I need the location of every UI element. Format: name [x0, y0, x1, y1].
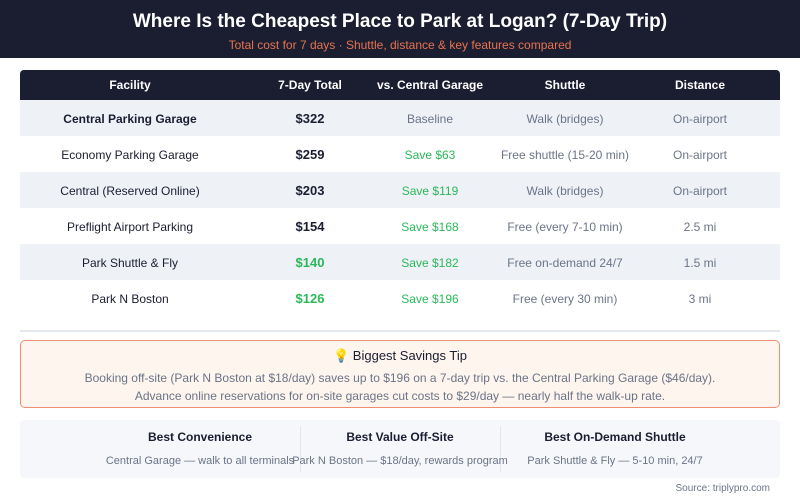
table: Save $196	[401, 292, 459, 306]
table: vs. Central Garage	[377, 78, 483, 92]
panel: best picks	[20, 420, 780, 478]
table: Save $63	[405, 148, 455, 162]
panel: best picks: Best Convenience	[148, 430, 252, 444]
table: 3 mi	[689, 292, 711, 306]
table: Save $182	[401, 256, 459, 270]
panel: best picks: Best On-Demand Shuttle	[544, 430, 686, 444]
table: Central Parking Garage	[63, 112, 197, 126]
source: Source: triplypro.com	[676, 483, 770, 494]
panel: best picks: Central Garage — walk to all terminals	[106, 455, 294, 467]
table: Free shuttle (15-20 min)	[501, 148, 629, 162]
table: $322	[296, 111, 324, 126]
table: Park Shuttle & Fly	[82, 256, 178, 270]
table: Walk (bridges)	[527, 112, 603, 126]
table: Free on-demand 24/7	[507, 256, 623, 270]
table: Free (every 30 min)	[513, 292, 617, 306]
table: 7-Day Total	[278, 78, 342, 92]
table: Free (every 7-10 min)	[507, 220, 623, 234]
table: $259	[296, 147, 324, 162]
table: Economy Parking Garage	[61, 148, 199, 162]
table	[20, 70, 780, 306]
table: Baseline	[407, 112, 453, 126]
table: On-airport	[673, 112, 727, 126]
table: 1.5 mi	[684, 256, 716, 270]
panel: best picks: Park Shuttle & Fly — 5-10 min, 24/7	[527, 455, 703, 467]
table: Shuttle	[545, 78, 585, 92]
table: Walk (bridges)	[527, 184, 603, 198]
table: Facility	[109, 78, 151, 92]
table: Central (Reserved Online)	[60, 184, 200, 198]
table: On-airport	[673, 148, 727, 162]
table: $203	[296, 183, 324, 198]
header: Where Is the Cheapest Place to Park at Logan? (7-Day Trip)	[133, 11, 667, 32]
table: Park N Boston	[91, 292, 169, 306]
table: Preflight Airport Parking	[67, 220, 193, 234]
table: $126	[296, 291, 324, 306]
table: Save $119	[402, 184, 458, 198]
callout: savings tip: 💡 Biggest Savings Tip	[333, 348, 467, 363]
table: 2.5 mi	[684, 220, 716, 234]
table: $140	[296, 255, 324, 270]
callout: savings tip: Advance online reservations for on-site garages cut costs to $29/day — nearly half the walk-up rate.	[135, 389, 665, 403]
header	[0, 0, 800, 58]
callout: savings tip: Booking off-site (Park N Boston at $18/day) saves up to $196 on a 7-day trip vs. the Central Parking Garage ($46/day).	[85, 371, 715, 385]
table: Save $168	[401, 220, 459, 234]
table: On-airport	[673, 184, 727, 198]
panel: best picks: Park N Boston — $18/day, rewards program	[292, 455, 508, 467]
table: Distance	[675, 78, 725, 92]
callout: savings tip	[20, 340, 780, 408]
panel: best picks: Best Value Off-Site	[346, 430, 454, 444]
header: Total cost for 7 days · Shuttle, distance & key features compared	[229, 38, 571, 52]
table: $154	[296, 219, 324, 234]
